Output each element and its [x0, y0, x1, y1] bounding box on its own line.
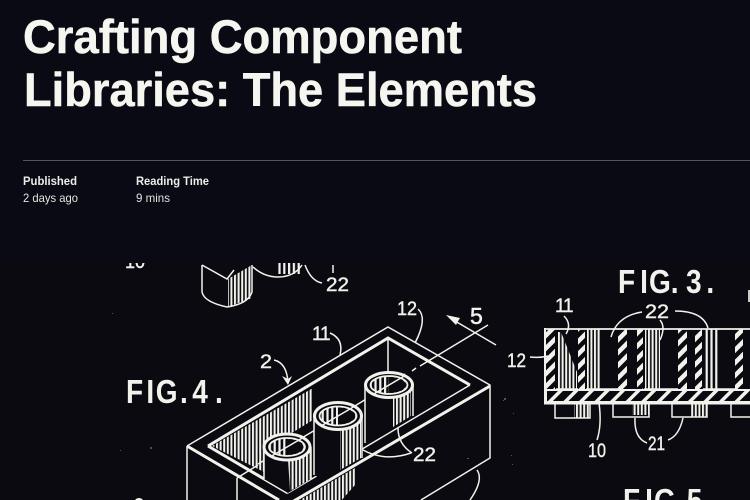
title [23, 10, 537, 116]
studs below section [555, 404, 750, 418]
title: Libraries: The Elements [24, 63, 537, 116]
figure 3: callouts and leaders: 12 [507, 351, 526, 372]
stud 3 [365, 372, 413, 443]
metadata: reading time [136, 174, 209, 205]
stud 1 [264, 434, 311, 493]
axis line [258, 325, 488, 464]
stud 2 [314, 402, 362, 480]
figure 3: cross section [544, 328, 750, 418]
figure 3: callouts and leaders [507, 296, 708, 462]
brick inner wall shading [212, 388, 313, 472]
figure 3 label: FIG.3. [618, 264, 714, 301]
figure 4: callouts and leaders: 11 [312, 324, 331, 345]
figure 4: callouts and leaders: 12 [397, 299, 417, 320]
figure 4: callouts and leaders: 22 [413, 445, 436, 466]
metadata: published [23, 174, 78, 205]
figure 3: callouts and leaders: 21 [648, 434, 665, 455]
bottom fragment [135, 498, 143, 500]
figure 4: callouts and leaders [260, 299, 496, 500]
figure 4 label: FIG.4. [126, 374, 223, 411]
metadata: published: Published [23, 174, 77, 188]
base band [546, 389, 750, 402]
title: Crafting Component [23, 10, 462, 63]
figure 4: callouts and leaders: 2 [260, 352, 272, 373]
figure 3: callouts and leaders: 11 [555, 296, 574, 317]
fragment: stud drawing above figure 4: 22 [326, 275, 349, 296]
metadata: reading time: Reading Time [136, 174, 209, 188]
vertical shading [556, 329, 735, 390]
metadata: reading time: 9 mins [136, 191, 170, 205]
figure 3: callouts and leaders: 10 [588, 441, 606, 462]
fragment: stud drawing above figure 4: 10 [125, 252, 145, 273]
shading below front rim [295, 468, 355, 500]
brick outline [187, 327, 490, 500]
hatched walls [545, 329, 743, 391]
fragment: stud drawing above figure 4 [126, 263, 348, 308]
figure 3: callouts and leaders: 22 [645, 302, 669, 323]
right edge fragment [748, 290, 750, 302]
figure 4: callouts and leaders: 5 [470, 303, 483, 329]
figure 4: brick [187, 325, 490, 500]
metadata: published: 2 days ago [23, 191, 78, 205]
patent drawing image [112, 263, 750, 500]
